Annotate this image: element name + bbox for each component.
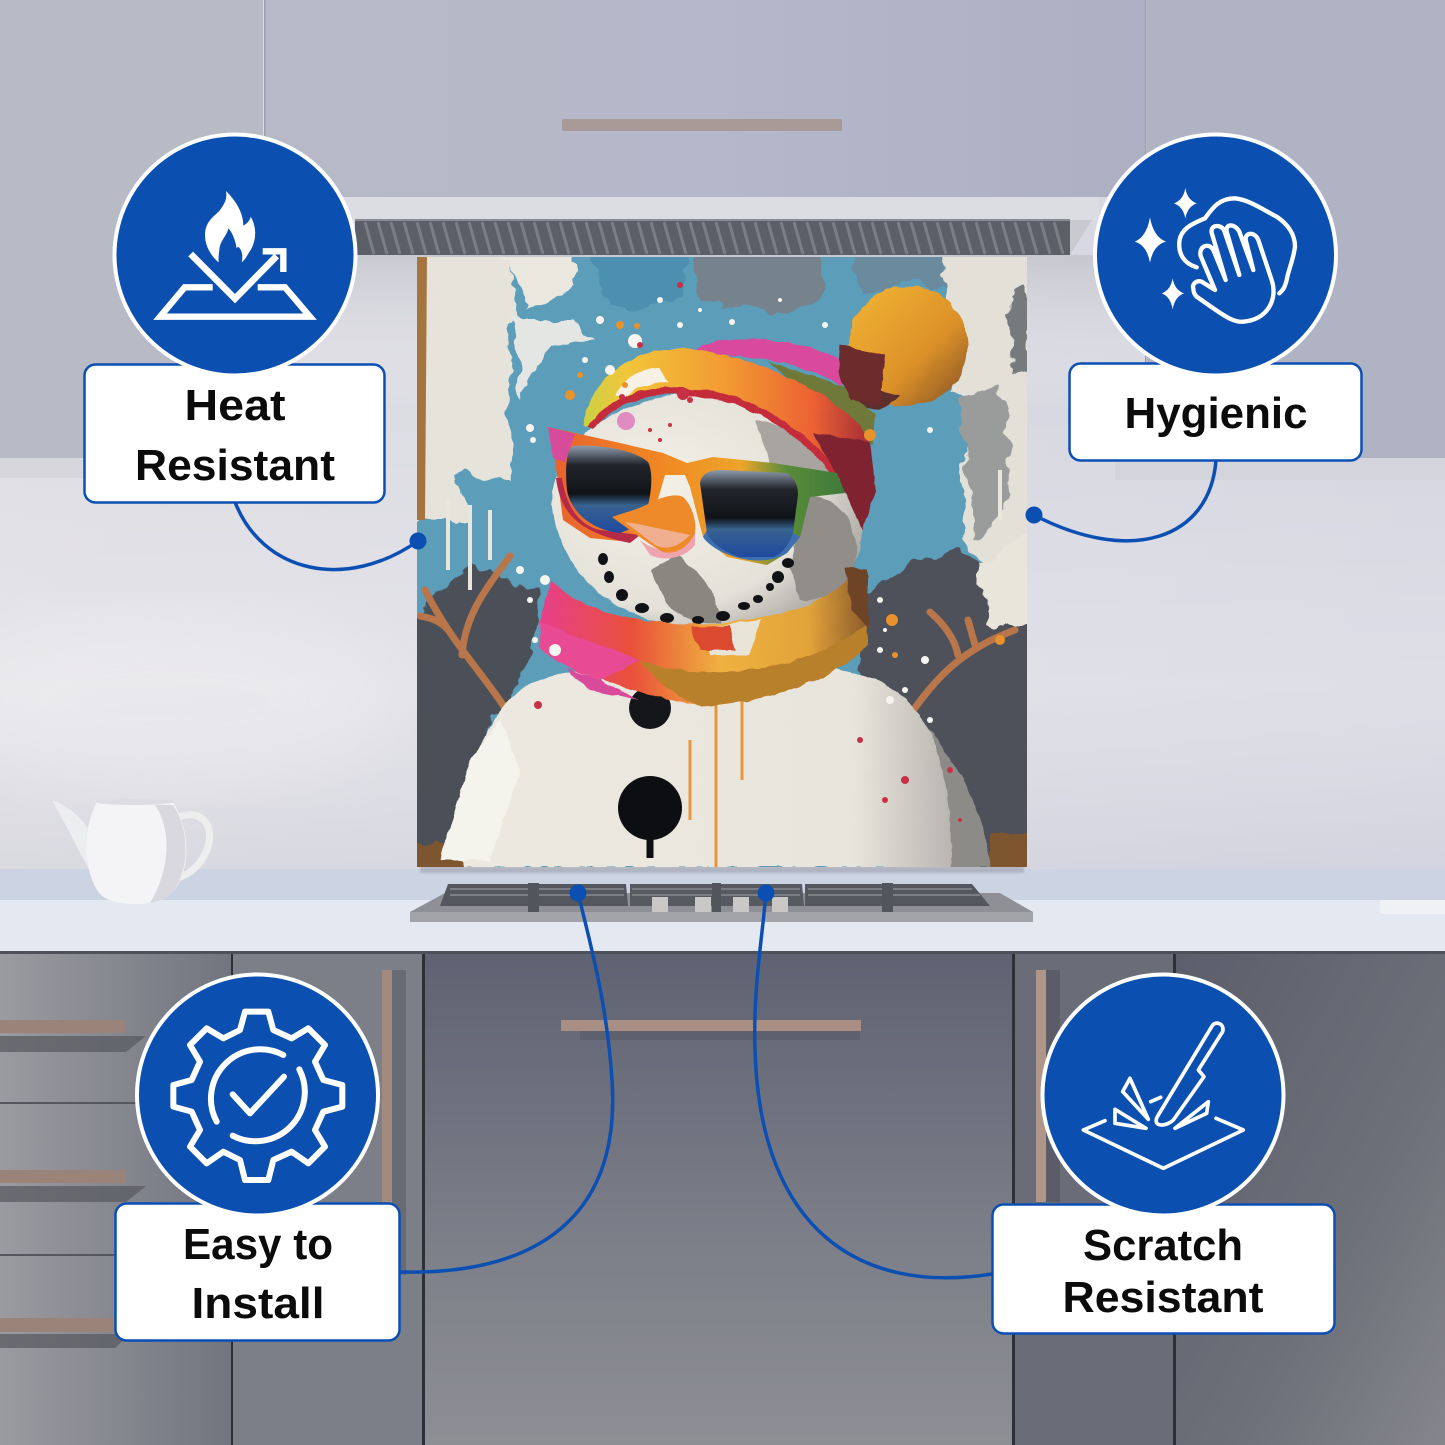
carrot nose [612,495,695,558]
label: easy to install: Install [192,1279,324,1328]
cooker hood [347,197,1099,255]
label: easy to install: Easy to [183,1220,333,1269]
body drips and buttons [618,687,742,867]
left canvas edge [417,257,427,520]
pom-pom [848,286,968,410]
connector: scratch resistant [755,884,992,1278]
hat [583,339,885,530]
label: scratch resistant: Scratch [1083,1221,1243,1270]
icon: knife scratch [1040,972,1286,1218]
label: heat resistant: Heat [184,381,286,430]
label: hygienic [1070,364,1362,460]
connector: hygienic [1026,460,1216,541]
snowman arms [420,556,1015,712]
icon: hygienic hand wiping [1093,132,1338,378]
label: scratch resistant [992,1204,1334,1334]
snowman head [552,394,862,633]
splashback shadow [420,866,1024,873]
teapot [52,799,210,904]
coal smile [598,553,794,624]
panel: snowman painting [405,245,1040,880]
icon: heat resistant [112,132,358,378]
label: scratch resistant: Resistant [1062,1273,1264,1322]
upper cabinets [0,0,1445,480]
label: heat resistant: Resistant [135,441,335,490]
connector: easy to install [400,884,613,1272]
scarf [540,568,868,706]
paint splatter [516,282,1005,822]
label: hygienic: Hygienic [1124,389,1308,438]
lower cabinets [0,954,1445,1445]
snowman body [440,668,990,867]
label: easy to install [116,1204,400,1340]
sunglasses [548,427,845,565]
cooktop [410,883,1033,922]
painted background blocks [405,245,1040,880]
connector: heat resistant [235,502,426,570]
countertop [0,869,1445,954]
label: heat resistant [84,364,384,502]
paint drips [448,470,1000,590]
icon: gear with check [135,972,380,1218]
